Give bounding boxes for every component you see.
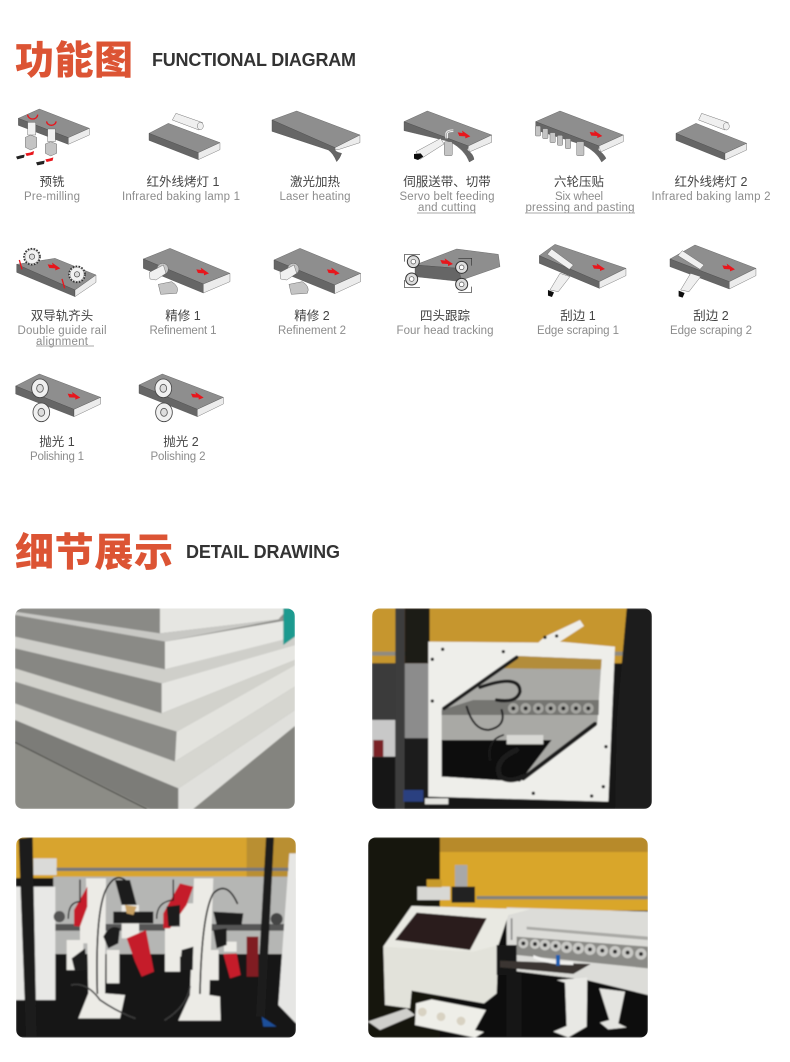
- step: six wheel pressing and pasting: 六轮压贴: [554, 175, 604, 189]
- photo: dual trimming heads: [16, 837, 296, 1038]
- step: polishing 2: 抛光 2: [163, 434, 199, 449]
- step: infrared baking lamp 2: 红外线烤灯 2: [675, 174, 748, 189]
- step: polishing 1: Polishing 1: [30, 451, 84, 463]
- step: pre-milling: 预铣: [39, 175, 65, 189]
- step: servo belt feeding and cutting: 伺服送带、切带: [403, 174, 491, 189]
- panel: process steps: [16, 109, 770, 463]
- step: edge scraping 2: [670, 245, 756, 337]
- step: four head tracking: [396, 249, 500, 337]
- step: refinement 2: Refinement 2: [278, 325, 346, 337]
- step: pre-milling: [16, 109, 89, 203]
- step: servo belt feeding and cutting: Servo belt feeding: [400, 191, 494, 203]
- step: double guide rail alignment: alignment: [36, 336, 89, 348]
- step: four head tracking: Four head tracking: [396, 325, 494, 337]
- step: laser heating: [272, 111, 360, 203]
- step: six wheel pressing and pasting: Six wheel: [555, 191, 603, 203]
- title: detail drawing: [15, 532, 340, 575]
- step: double guide rail alignment: [17, 249, 106, 348]
- step: polishing 2: Polishing 2: [150, 451, 206, 463]
- photo: white trimming frame: [372, 608, 652, 809]
- step: six wheel pressing and pasting: [525, 111, 635, 214]
- title: detail drawing: 细节展示: [15, 532, 173, 575]
- step: laser heating: Laser heating: [280, 191, 350, 203]
- step: servo belt feeding and cutting: [400, 111, 494, 214]
- step: infrared baking lamp 2: Infrared baking lamp 2: [652, 191, 770, 203]
- title: functional diagram: FUNCTIONAL DIAGRAM: [152, 50, 356, 70]
- step: edge scraping 1: [537, 244, 626, 337]
- step: infrared baking lamp 1: [122, 113, 240, 203]
- photo: stacked boards edge: [15, 608, 295, 809]
- photo: pre-milling cover unit: [368, 837, 648, 1038]
- step: polishing 1: [16, 374, 101, 463]
- step: refinement 2: 精修 2: [294, 308, 330, 323]
- step: refinement 1: [143, 248, 230, 337]
- title: functional diagram: 功能图: [15, 40, 133, 83]
- step: edge scraping 1: Edge scraping 1: [537, 325, 619, 337]
- step: edge scraping 1: 刮边 1: [560, 309, 596, 323]
- step: pre-milling: Pre-milling: [24, 191, 80, 203]
- title: functional diagram: [15, 40, 356, 83]
- step: six wheel pressing and pasting: pressing and pasting: [526, 202, 634, 214]
- step: edge scraping 2: 刮边 2: [693, 309, 729, 323]
- step: servo belt feeding and cutting: and cutting: [418, 202, 476, 214]
- step: polishing 1: 抛光 1: [39, 434, 75, 449]
- step: refinement 2: [274, 248, 361, 337]
- step: infrared baking lamp 2: [652, 113, 770, 203]
- step: refinement 1: Refinement 1: [150, 325, 216, 337]
- title: detail drawing: DETAIL DRAWING: [186, 542, 340, 562]
- step: four head tracking: 四头跟踪: [420, 309, 470, 323]
- step: edge scraping 2: Edge scraping 2: [670, 325, 752, 337]
- step: refinement 1: 精修 1: [165, 308, 201, 323]
- step: double guide rail alignment: Double guide rail: [18, 325, 106, 337]
- step: polishing 2: [139, 374, 223, 463]
- step: infrared baking lamp 1: 红外线烤灯 1: [147, 174, 220, 189]
- step: double guide rail alignment: 双导轨齐头: [31, 308, 93, 323]
- step: laser heating: 激光加热: [290, 175, 340, 189]
- step: infrared baking lamp 1: Infrared baking lamp 1: [122, 191, 240, 203]
